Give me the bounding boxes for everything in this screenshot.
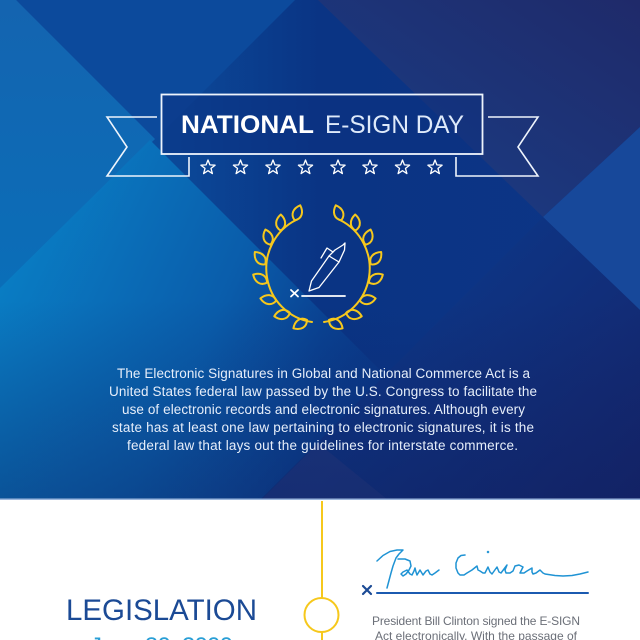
- signature line: [377, 592, 588, 594]
- timeline connector with node: [304, 501, 338, 640]
- left ribbon tail: [107, 117, 189, 176]
- title: [181, 111, 464, 139]
- title: NATIONAL: [181, 111, 314, 139]
- signature block: [363, 550, 588, 594]
- text block: intro paragraph: The Electronic Signatures in Global and National Commerce Act is a: [117, 366, 530, 381]
- title: E-SIGN DAY: [325, 111, 464, 139]
- text block: intro paragraph: United States federal law passed by the U.S. Congress to facilitate the: [109, 384, 537, 399]
- stars row: [201, 160, 442, 174]
- heading: legislation: LEGISLATION: [66, 594, 257, 627]
- left branch: [251, 204, 312, 332]
- Bill Clinton signature: [377, 550, 588, 588]
- text block: intro paragraph: state has at least one law pertaining to electronic signatures, it is the: [112, 420, 534, 435]
- icon: pen signing a line: [291, 243, 345, 296]
- ribbon banner: [107, 94, 538, 176]
- text block: intro paragraph: federal law that lays out the guidelines for interstate commerce.: [127, 438, 518, 453]
- text block: intro paragraph: use of electronic records and electronic signatures. Although every: [122, 402, 525, 417]
- right ribbon tail: [456, 117, 538, 176]
- text block: signing description: President Bill Clinton signed the E-SIGN: [372, 614, 580, 628]
- text block: intro paragraph: [109, 366, 537, 453]
- signature x mark: [363, 586, 371, 594]
- panel: blue hero background: [0, 0, 640, 500]
- icon: laurel wreath: [251, 204, 385, 332]
- ribbon box: [162, 94, 482, 154]
- text block: signing description: [372, 614, 580, 640]
- panel: white legislation section: [0, 500, 640, 640]
- right branch: [324, 204, 385, 332]
